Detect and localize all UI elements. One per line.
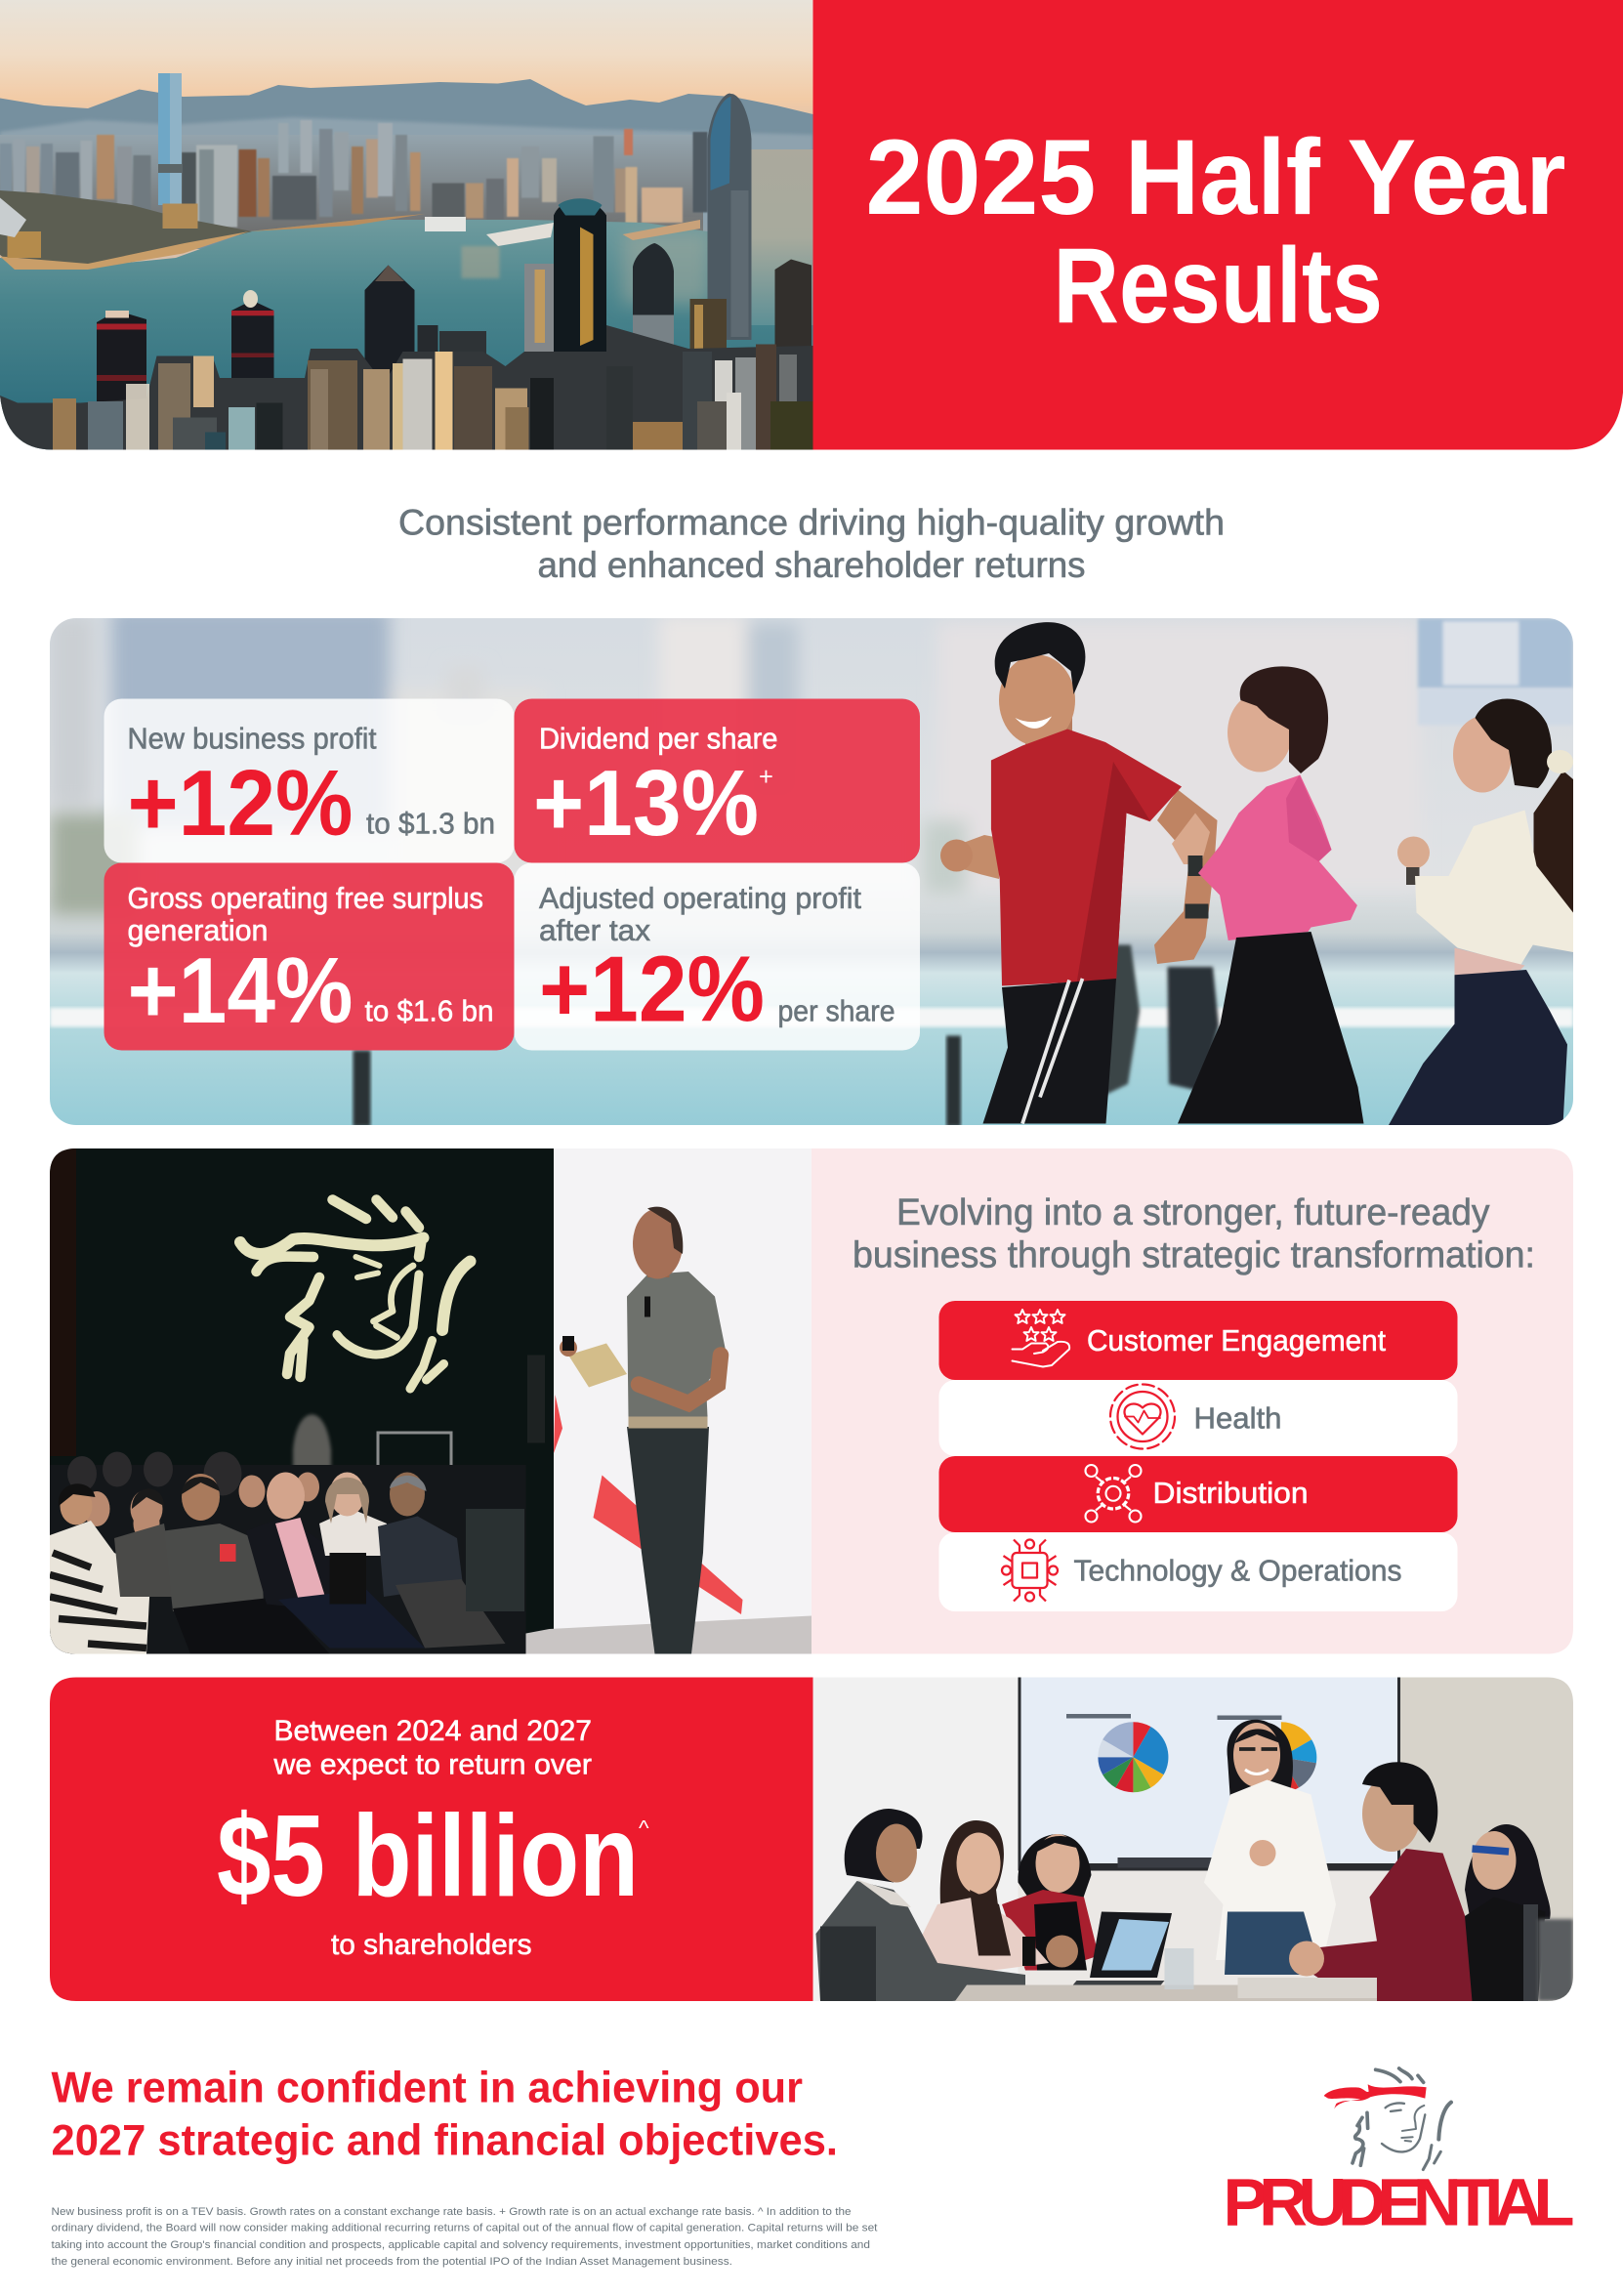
woman in blue glasses (1465, 1824, 1573, 2001)
photo: runners (940, 622, 1573, 1125)
returns text: $5 billion (217, 1792, 639, 1921)
card: adjusted operating profit: per share (777, 994, 895, 1028)
row: distribution: Distribution (1152, 1476, 1309, 1510)
title (865, 118, 1566, 346)
card: dividend per share: + (759, 764, 773, 791)
row: technology and operations: Technology & Operations (1074, 1554, 1402, 1588)
returns text: Between 2024 and 2027 (273, 1715, 592, 1747)
logo emblem (1324, 2068, 1451, 2170)
woman in red and black (1002, 1834, 1099, 1971)
row: distribution (939, 1456, 1457, 1532)
card: adjusted operating profit: +12% (539, 938, 765, 1042)
background staff (293, 1414, 331, 1509)
photo: speaker on stage (50, 1148, 812, 1654)
icon: microchip (1002, 1540, 1058, 1602)
photo: Hong Kong skyline (0, 0, 812, 450)
subtitle: and enhanced shareholder returns (537, 545, 1086, 585)
card: dividend per share: Dividend per share (539, 722, 777, 756)
row: customer engagement: Customer Engagement (1087, 1323, 1386, 1357)
woman in pink cardigan (916, 1820, 1049, 1978)
card: adjusted operating profit (514, 863, 920, 1051)
wordmark: PRUDENTIAL (1223, 2165, 1574, 2240)
returns text: to shareholders (331, 1929, 531, 1961)
icon: gear network (1086, 1465, 1141, 1523)
header banner (0, 0, 1623, 450)
runner in cream (1389, 698, 1573, 1125)
card: adjusted operating profit: Adjusted operating profit (539, 881, 861, 915)
card: dividend per share: +13% (533, 751, 759, 856)
title: 2025 Half Year (865, 118, 1566, 237)
laptop (1069, 1912, 1172, 1989)
table (955, 1985, 1377, 2001)
card: gross operating free surplus: Gross operating free surplus (127, 881, 483, 915)
Prudential logo (1223, 2068, 1574, 2240)
blurred waterfront background (50, 608, 1573, 1127)
pie chart right (1275, 1722, 1316, 1793)
runner in red (940, 622, 1217, 1124)
footnote: New business profit is on a TEV basis. Growth rates on a constant exchange rate basis. + Growth rate is on an actual exchange rate basis. ^ In addition to the (51, 2206, 852, 2218)
photo: team meeting (812, 1678, 1573, 2001)
card: new business profit: New business profit (127, 722, 377, 756)
card: gross operating free surplus (104, 863, 514, 1051)
pink background panel (812, 1148, 1573, 1654)
closing statement (51, 2065, 838, 2165)
icon: heart monitor (1110, 1385, 1175, 1449)
closing statement: 2027 strategic and financial objectives. (51, 2117, 838, 2165)
speaker (560, 1207, 727, 1654)
card: new business profit: +12% (127, 751, 354, 856)
card: new business profit (104, 699, 514, 863)
card: gross operating free surplus: generation (127, 913, 268, 947)
runner in pink (1172, 666, 1363, 1124)
card: gross operating free surplus: to $1.6 bn (365, 994, 494, 1028)
row: health: Health (1193, 1401, 1281, 1436)
transformation heading (853, 1191, 1535, 1276)
footnote (51, 2206, 878, 2268)
panel: shareholder returns (50, 1678, 1573, 2001)
subtitle: Consistent performance driving high-quality growth (398, 503, 1225, 543)
row: health (939, 1380, 1457, 1456)
card: dividend per share (514, 699, 920, 863)
card: adjusted operating profit: after tax (539, 913, 651, 947)
transformation heading: business through strategic transformation: (853, 1234, 1535, 1276)
returns text: ^ (639, 1816, 649, 1841)
screen title labels (1066, 1714, 1281, 1720)
card: gross operating free surplus: +14% (127, 939, 354, 1043)
footnote: ordinary dividend, the Board will now consider making additional recurring returns of capital out of the annual flow of capital generation. Capital returns will be set (51, 2223, 878, 2234)
presenter in white shirt (1204, 1720, 1336, 1975)
closing statement: We remain confident in achieving our (51, 2065, 803, 2112)
returns text (217, 1715, 649, 1961)
row: technology and operations (939, 1532, 1457, 1611)
man in grey jacket (816, 1809, 1078, 2001)
audience (50, 1452, 525, 1654)
projected logo (240, 1200, 471, 1389)
icon: stars in hand (1012, 1310, 1069, 1367)
peninsula and harbourfront (0, 190, 700, 270)
pie chart left (1098, 1722, 1168, 1792)
red returns box (50, 1678, 812, 2001)
card: new business profit: to $1.3 bn (366, 807, 495, 841)
subtitle (398, 503, 1225, 585)
returns text: we expect to return over (272, 1749, 592, 1781)
footnote: the general economic environment. Before any initial net proceeds from the potential IPO of the Indian Asset Management business. (51, 2256, 732, 2268)
foreground buildings (0, 325, 812, 450)
footnote: taking into account the Group's financial condition and prospects, applicable capital and solvency requirements, investment opportunities, market conditions and (51, 2239, 870, 2251)
red title panel (812, 0, 1623, 450)
man in maroon (1289, 1762, 1479, 2001)
panel: key metrics with runners (50, 608, 1573, 1127)
row: customer engagement (939, 1301, 1457, 1380)
title: Results (1053, 227, 1383, 346)
panel: strategic transformation (50, 1148, 1573, 1654)
transformation heading: Evolving into a stronger, future-ready (896, 1191, 1490, 1233)
